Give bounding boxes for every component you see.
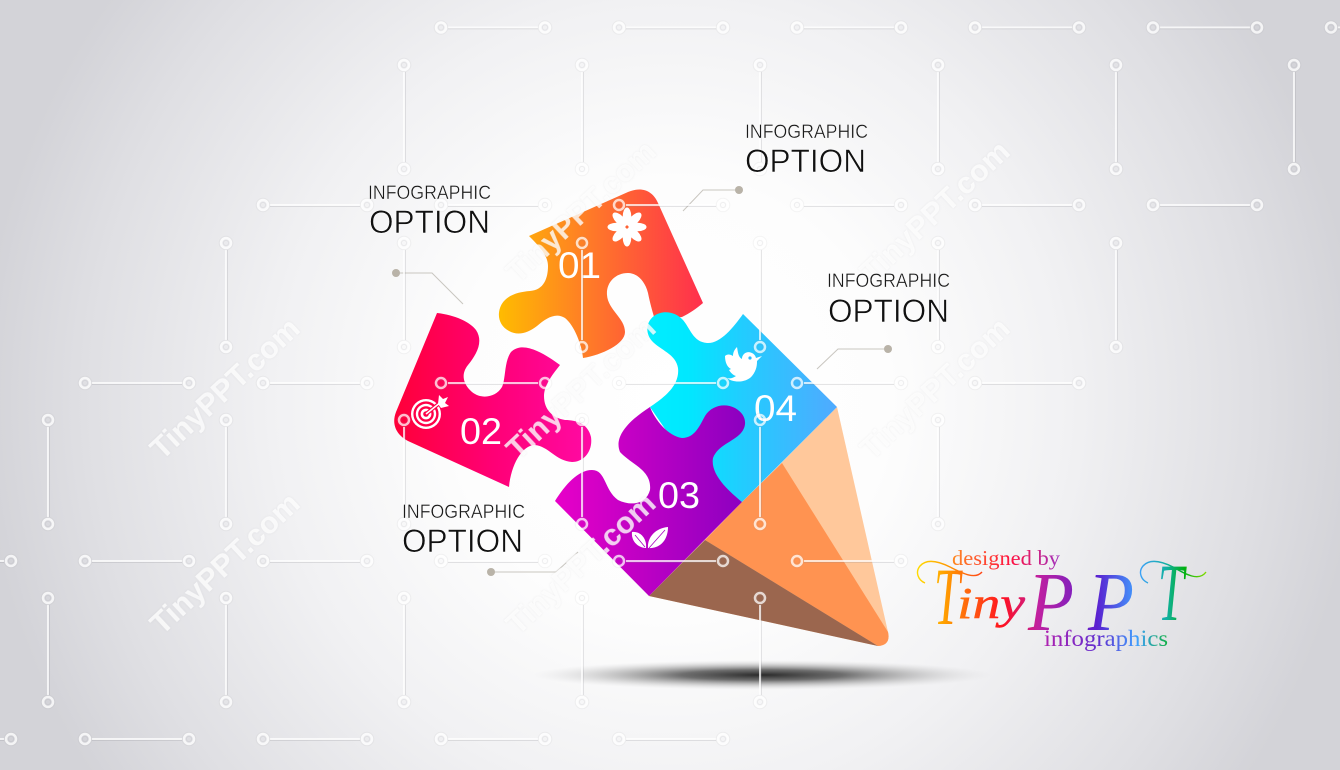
puzzle piece 01	[499, 189, 703, 358]
watermarks: TinyPPT.com	[143, 310, 306, 466]
cone: orange face	[705, 463, 889, 646]
icon: target with arrow	[411, 395, 449, 429]
cone: brown face	[649, 540, 878, 646]
icon: twitter bird	[725, 347, 762, 382]
text block: option 01: OPTION	[745, 143, 866, 179]
number 03: 03	[658, 475, 700, 516]
watermarks: TinyPPT.com	[853, 310, 1016, 466]
text block: option 02: INFOGRAPHIC	[368, 183, 491, 204]
puzzle piece 04	[647, 312, 837, 502]
number 04: 04	[754, 388, 797, 429]
number 02: 02	[460, 411, 502, 452]
text block: option 03	[402, 502, 525, 559]
cone illustration	[649, 407, 889, 646]
icon: leaves	[632, 527, 668, 548]
logo: designed by TinyPPT infographics: iny	[957, 579, 1026, 628]
cone: light peach face	[649, 407, 889, 646]
number 01: 01	[558, 245, 601, 286]
text block: option 02	[368, 183, 491, 240]
watermarks: TinyPPT.com	[499, 133, 662, 289]
icon: flower	[608, 208, 646, 246]
leader line: option 04	[817, 345, 892, 369]
puzzle piece 03	[555, 405, 745, 596]
watermarks: TinyPPT.com	[853, 133, 1016, 289]
logo: designed by TinyPPT infographics: T	[1158, 547, 1187, 638]
piece numbers	[460, 245, 797, 516]
logo: designed by TinyPPT infographics: P	[1087, 556, 1134, 649]
text block: option 01: INFOGRAPHIC	[745, 122, 868, 143]
watermarks: TinyPPT.com	[499, 485, 662, 641]
watermarks: TinyPPT.com	[499, 310, 662, 466]
text block: option 04	[827, 271, 950, 329]
text block: option 01	[745, 122, 868, 179]
text block: option 04: OPTION	[828, 293, 949, 329]
text block: option 03: OPTION	[402, 523, 523, 559]
leader line: option 03	[487, 552, 578, 576]
watermarks: TinyPPT.com	[143, 485, 306, 641]
watermarks	[143, 133, 1016, 641]
text block: option 03: INFOGRAPHIC	[402, 502, 525, 523]
logo: designed by TinyPPT infographics: T	[934, 551, 963, 642]
ground shadow	[532, 660, 992, 690]
logo: designed by TinyPPT infographics	[918, 546, 1206, 651]
logo: designed by TinyPPT infographics: infographics	[1044, 626, 1168, 651]
leader line: option 02	[392, 269, 463, 304]
logo: designed by TinyPPT infographics: designed by	[952, 546, 1061, 570]
leader line: option 01	[683, 186, 743, 211]
puzzle piece 02	[394, 313, 591, 487]
text block: option 02: OPTION	[369, 204, 490, 240]
text block: option 04: INFOGRAPHIC	[827, 271, 950, 292]
logo: designed by TinyPPT infographics: P	[1027, 556, 1074, 649]
